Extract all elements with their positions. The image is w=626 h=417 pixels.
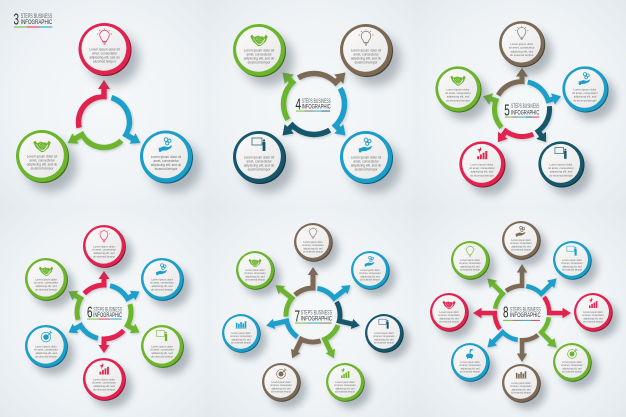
step circle: red: Lorem ipsum dolor	[439, 312, 459, 314]
step circle: red	[574, 293, 619, 338]
step circle: blue	[140, 130, 201, 192]
step circle: green: do eiusmod tempor	[460, 268, 480, 271]
step circle: red	[78, 23, 140, 85]
step circle: green: do eiusmod tempor	[151, 355, 173, 359]
step circle: green: Lorem ipsum dolor	[151, 345, 173, 348]
step circle: brown: do eiusmod tempor	[271, 390, 291, 393]
step circle: brown: Lorem ipsum dolor	[511, 383, 531, 385]
step circle: brown: Lorem ipsum dolor	[303, 242, 323, 244]
step circle: blue	[222, 314, 267, 359]
step circle: blue: adipiscing elit, sed	[231, 338, 251, 341]
step circle: green: adipiscing elit, sed do	[244, 57, 274, 61]
title: 6 steps: INFOGRAPHIC	[93, 312, 122, 319]
central arrow ring	[473, 264, 571, 362]
arrow: green	[316, 323, 352, 361]
step circle: blue: sit amet, consectetur	[230, 335, 252, 338]
step circle: brown: Lorem ipsum dolor	[511, 240, 531, 242]
step circle: green: do eiusmod tempor	[245, 278, 265, 281]
step circle: blue: do eiusmod tempor	[231, 341, 251, 344]
title: 4 steps: INFOGRAPHIC	[302, 104, 331, 110]
step circle: blue: sit amet, consectetur	[572, 91, 598, 95]
step circle: green: adipiscing elit, sed	[35, 284, 57, 288]
arrow: brown	[296, 50, 350, 104]
arrow: blue	[95, 94, 154, 148]
step circle: green: Lorem ipsum dolor	[562, 362, 582, 364]
title: 5 steps: INFOGRAPHIC	[511, 110, 539, 117]
step circle: green	[16, 130, 77, 192]
step circle: brown: Lorem ipsum dolor sit	[351, 49, 381, 53]
title: 6 steps: 6	[87, 304, 93, 322]
arrow: blue	[314, 86, 368, 140]
step circle: teal: eiusmod tempor	[248, 168, 271, 172]
step circle: teal: adipiscing elit, sed	[550, 170, 573, 174]
title: 7 steps: 7	[294, 308, 300, 326]
step circle: red: adipiscing elit, sed do	[89, 56, 120, 60]
step circle: blue	[553, 241, 598, 286]
step circle: blue: sit amet, consectetur	[150, 281, 174, 285]
step circle: red: adipiscing elit, sed	[583, 317, 603, 320]
central arrow ring	[260, 50, 368, 158]
step circle: red	[83, 225, 132, 275]
step circle: blue	[25, 325, 74, 375]
step circle: blue: do eiusmod tempor	[562, 268, 582, 271]
step circle: brown: do eiusmod tempor	[510, 53, 534, 57]
step circle: red: do eiusmod tempor	[583, 320, 603, 323]
title: 7 steps: INFOGRAPHIC	[301, 316, 332, 322]
step circle: green: adipiscing elit, sed	[562, 367, 582, 370]
title: 8 steps	[503, 304, 541, 322]
step circle: blue: adipiscing elit, sed	[574, 95, 597, 99]
step circle: blue: adipiscing elit, sed	[151, 284, 173, 288]
step circle: red	[83, 358, 132, 408]
panel: 6 steps	[0, 208, 209, 417]
step circle: green	[326, 363, 371, 408]
step circle: green: sit amet, consectetur	[459, 262, 481, 265]
arrow: blue	[108, 273, 142, 308]
central arrow ring	[475, 68, 567, 157]
arrow: green	[533, 315, 569, 351]
arrow: brown	[505, 264, 527, 293]
step circle: brown: adipiscing elit, sed	[303, 247, 323, 250]
step circle: red: Lorem ipsum dolor sit	[89, 48, 120, 52]
step circle: teal	[538, 141, 591, 195]
arrow: green	[65, 114, 124, 167]
step circle: brown	[340, 24, 401, 86]
step circle: teal: adipiscing elit, sed do	[244, 164, 274, 168]
step circle: blue: do eiusmod tempor	[151, 288, 173, 292]
step circle: blue: Lorem ipsum dolor sit	[151, 155, 181, 159]
arrow: red	[82, 271, 110, 295]
step circle: green: do eiusmod tempor	[35, 288, 57, 292]
panel: 7 steps	[209, 208, 418, 417]
step circle: red: adipiscing elit, sed	[439, 317, 459, 320]
step circle: green: adipiscing elit, sed	[447, 95, 470, 99]
step circle: brown: sit amet, consectetur	[270, 384, 292, 387]
step circle: brown: amet, consectetur	[353, 53, 380, 57]
arrow: red	[542, 296, 571, 318]
step circle: green: adipiscing elit, sed	[460, 265, 480, 268]
step circle: red: sit amet, consectetur	[438, 314, 460, 317]
step circle: blue: Lorem ipsum dolor	[562, 260, 582, 262]
step circle: brown	[262, 363, 307, 408]
title: 4 steps	[296, 96, 331, 114]
title: 6 steps	[87, 304, 122, 322]
step circle: blue: do eiusmod tempor	[460, 370, 480, 373]
step circle: red: do eiusmod tempor	[93, 255, 115, 259]
title: 8 steps: 8	[503, 304, 509, 322]
step circle: brown: do eiusmod tempor	[303, 250, 323, 253]
step circle: brown: Lorem ipsum dolor	[510, 42, 533, 46]
arrow: blue	[315, 270, 354, 308]
arrow: brown	[293, 267, 318, 297]
step circle: teal: amet, consectetur	[246, 160, 273, 164]
step circle: blue: sit amet, consectetur	[34, 348, 58, 352]
step circle: blue	[340, 131, 401, 193]
step circle: brown	[502, 364, 547, 409]
step circle: green: amet, consectetur	[246, 53, 273, 57]
arrow: blue	[526, 72, 563, 111]
title: 8 steps: STEPS BUSINESS	[510, 306, 541, 313]
step circle: brown: sit amet, consectetur	[510, 242, 532, 245]
step circle: green: adipiscing elit, sed	[335, 387, 355, 390]
arrow: green	[260, 68, 314, 122]
step circle: blue: Lorem ipsum dolor	[460, 362, 480, 364]
step circle: teal: do eiusmod tempor	[549, 173, 573, 177]
step circle: red: Lorem ipsum dolor	[471, 162, 493, 166]
step circle: green: Lorem ipsum dolor	[35, 278, 57, 281]
step circle: red: adipiscing elit, sed	[93, 384, 115, 388]
arrow: green	[116, 302, 150, 337]
step circle: red: do eiusmod tempor	[439, 320, 459, 323]
step circle: red: Lorem ipsum dolor	[93, 245, 115, 248]
step circle: blue: eiusmod tempor	[155, 167, 178, 171]
arrow: teal	[330, 300, 364, 331]
step circle: green: Lorem ipsum dolor	[447, 87, 469, 91]
step circle: red: Lorem ipsum dolor	[93, 378, 115, 381]
panel: 8 steps	[418, 208, 626, 417]
step circle: green: Lorem ipsum dolor	[335, 382, 355, 384]
step circle: green	[435, 66, 488, 120]
step circle: red: sit amet, consectetur	[469, 166, 495, 170]
step circle: blue: Lorem ipsum dolor	[360, 270, 380, 272]
step circle: brown	[502, 221, 547, 266]
title: 4 steps: STEPS BUSINESS	[302, 98, 331, 105]
step circle: blue: amet, consectetur	[153, 159, 180, 163]
panel: 4 steps	[209, 0, 418, 208]
step circle: red	[459, 141, 512, 195]
step circle: green	[553, 343, 598, 388]
step circle: green: sit amet, consectetur	[34, 281, 58, 285]
step circle: brown: adipiscing elit, sed	[511, 388, 531, 391]
step circle: green: do eiusmod tempor	[446, 98, 470, 102]
step circle: green: do eiusmod tempor	[562, 370, 582, 373]
step circle: blue: amet, consectetur	[353, 160, 380, 164]
step circle: brown: adipiscing elit, sed	[510, 49, 533, 53]
step circle: blue: Lorem ipsum dolor	[151, 278, 173, 281]
arrow: blue	[66, 316, 100, 351]
step circle: blue	[351, 251, 396, 296]
title: 8 steps: INFOGRAPHIC	[510, 312, 541, 319]
step circle: brown	[499, 21, 552, 75]
step circle: blue	[451, 343, 496, 388]
step circle: blue	[562, 66, 615, 120]
step circle: red: sit amet, consectetur	[582, 314, 604, 317]
central arrow ring	[65, 80, 154, 167]
step circle: brown: Lorem ipsum dolor	[271, 382, 291, 384]
step circle: blue: Lorem ipsum dolor	[231, 333, 251, 335]
step circle: brown: adipiscing elit, sed	[511, 245, 531, 248]
title: 5 steps: STEPS BUSINESS	[511, 103, 540, 110]
step circle: brown: do eiusmod tempor	[511, 391, 531, 394]
step circle: blue: do eiusmod tempor	[573, 98, 597, 102]
step circle: blue: adipiscing elit, sed	[360, 275, 380, 278]
step circle: green	[451, 241, 496, 286]
step circle: green: eiusmod tempor	[248, 61, 271, 65]
title: 3 steps: 3	[14, 12, 19, 28]
arrow: teal	[278, 104, 332, 158]
step circle: green	[233, 24, 294, 86]
step circle: teal: do eiusmod tempor	[374, 341, 394, 344]
arrow: teal	[524, 104, 567, 146]
arrow: red	[76, 80, 110, 128]
step circle: red: sit amet, consectetur	[92, 381, 116, 385]
step circle: green: Lorem ipsum dolor sit	[244, 49, 274, 53]
step circle: green	[236, 251, 281, 296]
central arrow ring	[58, 271, 150, 353]
step circle: green	[141, 325, 190, 375]
step circle: red: adipiscing elit, sed	[471, 170, 494, 174]
arrow: blue	[265, 314, 300, 345]
panel: 5 steps	[418, 0, 626, 208]
step circle: brown: eiusmod tempor	[355, 61, 378, 65]
title: 6 steps: STEPS BUSINESS	[93, 306, 122, 313]
step circle: blue: adipiscing elit, sed	[460, 367, 480, 370]
step circle: teal	[233, 131, 294, 193]
title: 5 steps	[504, 102, 540, 120]
step circle: red: Lorem ipsum dolor	[583, 312, 603, 314]
panel: 3 steps	[0, 0, 209, 208]
step circle: blue: Lorem ipsum dolor sit	[351, 156, 381, 160]
step circle: red: eiusmod tempor	[93, 60, 117, 64]
step circle: teal: Lorem ipsum dolor	[550, 162, 572, 166]
step circle: blue: adipiscing elit, sed do	[351, 164, 381, 168]
step circle: brown	[294, 223, 339, 268]
step circle: green: adipiscing elit, sed	[245, 275, 265, 278]
arrow: green	[58, 287, 92, 322]
arrow: brown	[287, 329, 323, 367]
step circle: red	[430, 293, 475, 338]
step circle: teal: Lorem ipsum dolor sit	[244, 156, 274, 160]
title: 5 steps: 5	[504, 102, 510, 120]
step circle: blue: Lorem ipsum dolor	[574, 87, 596, 91]
arrow: red	[493, 116, 536, 157]
step circle: brown: sit amet, consectetur	[509, 46, 535, 50]
arrow: blue	[524, 266, 560, 302]
step circle: brown: sit amet, consectetur	[510, 385, 532, 388]
step circle: teal	[365, 314, 410, 359]
title: 3 steps: STEPS BUSINESS	[21, 13, 53, 20]
step circle: red: do eiusmod tempor	[93, 388, 115, 392]
step circle: green: adipiscing elit, sed	[151, 351, 173, 355]
step circle: brown: do eiusmod tempor	[511, 248, 531, 251]
title: 4 steps: 4	[296, 96, 301, 114]
arrow: red	[473, 308, 502, 330]
title: 3 steps: INFOGRAPHIC	[21, 19, 53, 26]
step circle: green: Lorem ipsum dolor sit	[27, 155, 57, 159]
step circle: green: amet, consectetur	[29, 159, 56, 163]
step circle: red: amet, consectetur	[92, 52, 118, 56]
step circle: teal: sit amet, consectetur	[373, 335, 395, 338]
step circle: brown: sit amet, consectetur	[302, 244, 324, 247]
title: 7 steps: STEPS BUSINESS	[301, 310, 332, 316]
step circle: blue: sit amet, consectetur	[359, 272, 381, 275]
step circle: teal: Lorem ipsum dolor	[374, 333, 394, 335]
step circle: blue: eiusmod tempor	[355, 168, 378, 172]
arrow: blue	[484, 324, 520, 360]
title: 3 steps	[14, 12, 53, 28]
arrow: brown	[496, 68, 528, 96]
step circle: blue: adipiscing elit, sed	[562, 265, 582, 268]
step circle: blue: adipiscing elit, sed	[35, 351, 57, 355]
step circle: blue: do eiusmod tempor	[35, 355, 57, 359]
step circle: blue: do eiusmod tempor	[360, 278, 380, 281]
step circle: brown: adipiscing elit, sed	[271, 387, 291, 390]
step circle: teal: sit amet, consectetur	[548, 166, 574, 170]
step circle: green: sit amet, consectetur	[334, 384, 356, 387]
arrow: green	[475, 91, 512, 130]
arrow: red	[98, 329, 126, 353]
step circle: green: Lorem ipsum dolor	[460, 260, 480, 262]
step circle: green: sit amet, consectetur	[445, 91, 471, 95]
step circle: green: sit amet, consectetur	[561, 364, 583, 367]
arrow: green	[475, 275, 511, 311]
step circle: green: do eiusmod tempor	[335, 390, 355, 393]
step circle: red: adipiscing elit, sed	[93, 251, 115, 255]
step circle: green: sit amet, consectetur	[244, 272, 266, 275]
step circle: red: sit amet, consectetur	[92, 248, 116, 252]
central arrow ring	[263, 267, 364, 367]
title: 7 steps	[294, 308, 332, 326]
arrow: brown	[517, 333, 539, 362]
step circle: green: eiusmod tempor	[31, 167, 54, 171]
step circle: green: adipiscing elit, sed do	[27, 163, 57, 167]
step circle: blue: sit amet, consectetur	[561, 262, 583, 265]
step circle: brown: adipiscing elit, sed do	[351, 57, 381, 61]
step circle: green	[25, 258, 74, 308]
step circle: blue: sit amet, consectetur	[459, 364, 481, 367]
step circle: blue: adipiscing elit, sed do	[151, 163, 181, 167]
step circle: teal: adipiscing elit, sed	[374, 338, 394, 341]
step circle: blue	[141, 258, 190, 308]
step circle: red: do eiusmod tempor	[470, 173, 494, 177]
step circle: green: Lorem ipsum dolor	[245, 270, 265, 272]
step circle: blue: Lorem ipsum dolor	[35, 345, 57, 348]
step circle: green: sit amet, consectetur	[150, 348, 174, 352]
arrow: green	[263, 281, 302, 319]
